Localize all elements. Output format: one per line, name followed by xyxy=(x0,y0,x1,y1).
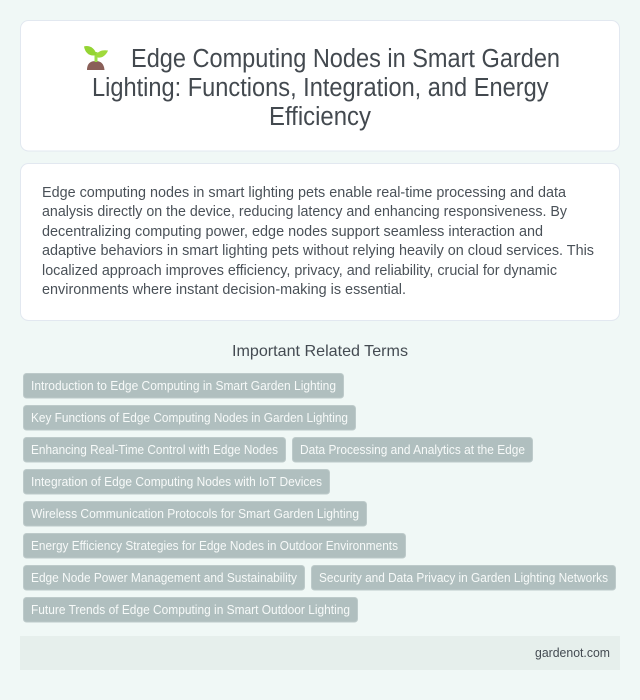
tag: future trends xyxy=(24,598,358,622)
text block: summary paragraph: analysis directly on the device, reducing latency and enhancing responsiveness. By xyxy=(42,203,567,220)
tag: future trends: Future Trends of Edge Computing in Smart Outdoor Lighting xyxy=(31,603,350,617)
tag: security and privacy xyxy=(312,566,616,590)
tag: security and privacy: Security and Data Privacy in Garden Lighting Networks xyxy=(319,571,608,585)
tag: power management: Edge Node Power Management and Sustainability xyxy=(31,571,298,585)
tag: introduction: Introduction to Edge Computing in Smart Garden Lighting xyxy=(31,379,336,393)
tag: energy efficiency xyxy=(24,534,406,558)
tag: data processing xyxy=(292,438,532,462)
tag: real-time control xyxy=(24,438,286,462)
tag: wireless protocols: Wireless Communication Protocols for Smart Garden Lighting xyxy=(31,507,359,521)
footer bar xyxy=(20,636,620,670)
footer bar: gardenot.com xyxy=(535,646,610,660)
tag: wireless protocols xyxy=(24,502,366,526)
text block: summary paragraph: localized approach improves efficiency, privacy, and reliability, crucial for dynamic xyxy=(42,262,557,279)
title xyxy=(92,45,560,131)
title: Lighting: Functions, Integration, and Energy xyxy=(92,74,549,102)
tag: iot integration xyxy=(24,470,330,494)
title: Efficiency xyxy=(269,103,371,131)
tag: key functions: Key Functions of Edge Computing Nodes in Garden Lighting xyxy=(31,411,348,425)
text block: summary paragraph xyxy=(42,184,594,298)
panel: title card xyxy=(20,20,620,151)
tag: energy efficiency: Energy Efficiency Strategies for Edge Nodes in Outdoor Environments xyxy=(31,539,398,553)
tag: power management xyxy=(24,566,304,590)
tag: data processing: Data Processing and Analytics at the Edge xyxy=(300,443,525,457)
tag: introduction xyxy=(24,374,344,398)
text block: summary paragraph: decentralizing computing power, edge nodes support seamless interaction and xyxy=(42,223,543,240)
text block: summary paragraph: environments where instant decision-making is essential. xyxy=(42,281,406,298)
heading: important related terms: Important Related Terms xyxy=(232,343,408,360)
tag list: related terms xyxy=(24,374,616,622)
tag: iot integration: Integration of Edge Computing Nodes with IoT Devices xyxy=(31,475,322,489)
tag: real-time control: Enhancing Real-Time Control with Edge Nodes xyxy=(31,443,278,457)
text block: summary paragraph: Edge computing nodes in smart lighting pets enable real-time processing and data xyxy=(42,184,567,201)
icon: seedling xyxy=(84,46,108,70)
tag: key functions xyxy=(24,406,356,430)
title: Edge Computing Nodes in Smart Garden xyxy=(131,45,560,73)
panel: summary xyxy=(20,164,620,320)
text block: summary paragraph: adaptive behaviors in smart lighting pets without relying heavily on cloud services. This xyxy=(42,242,594,259)
